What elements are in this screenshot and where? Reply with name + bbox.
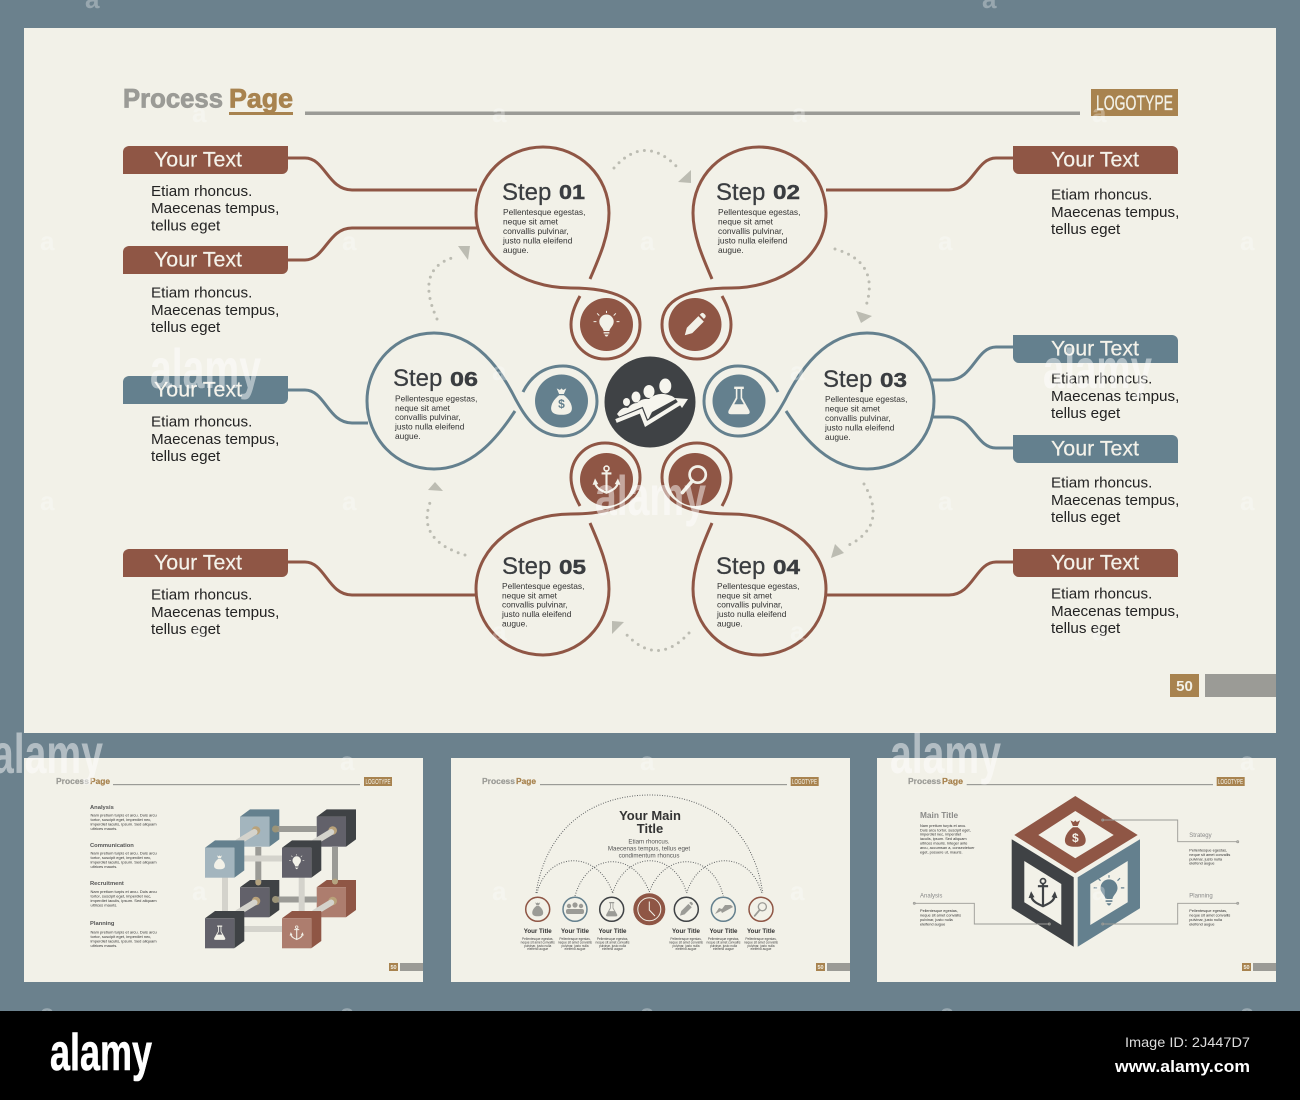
- watermark layer: a: [790, 616, 805, 646]
- text: Strategy: [1189, 833, 1230, 866]
- page number: 50: [1176, 678, 1193, 695]
- step 04 text: augue.: [717, 618, 743, 628]
- node: magnifier: [749, 897, 773, 921]
- text: Main Title: Duis arcu tortor, suscipit eget,: [920, 828, 971, 832]
- watermark layer: a: [192, 876, 207, 906]
- step 04 text: convallis pulvinar,: [717, 600, 783, 610]
- step 04 text: Step: [716, 553, 765, 580]
- callout: left 2: Your Text: [154, 248, 242, 272]
- callout: left 1: Maecenas tempus,: [151, 200, 279, 217]
- step 05 text: [501, 553, 586, 628]
- cube: left face: [1012, 839, 1074, 947]
- labels under nodes: pulvinar, justo nulla: [524, 944, 551, 948]
- title: Process Page: Page: [229, 84, 293, 114]
- watermark layer: alamy: [150, 337, 261, 400]
- callout: right 1: Maecenas tempus,: [1051, 204, 1179, 221]
- step 06 text: [393, 365, 478, 441]
- callout: right 2: Your Text: [1051, 336, 1139, 360]
- step 05 text: neque sit amet: [502, 590, 558, 600]
- watermark layer: a: [192, 98, 207, 128]
- slide header: Page: [516, 777, 537, 786]
- callout: right 1: Your Text: [1051, 148, 1139, 172]
- page number: [1170, 674, 1276, 697]
- step 02 text: convallis pulvinar,: [718, 226, 784, 236]
- main title: Etiam rhoncus.: [628, 838, 670, 846]
- slide header: LOGOTYPE: [366, 779, 391, 786]
- text: Analysis: eleifend augue: [920, 922, 945, 926]
- text: Analysis: ultrices mauris.: [90, 826, 117, 831]
- slide header: [482, 777, 819, 786]
- page number: 50: [817, 965, 824, 971]
- watermark layer: a: [938, 226, 953, 256]
- callout: right 1: tellus eget: [1051, 221, 1121, 238]
- title: Process Page: [123, 84, 293, 115]
- callout: left 4: [123, 549, 288, 638]
- step 03 text: Step: [823, 366, 872, 393]
- icon: money bag: $: [558, 397, 565, 411]
- labels under nodes: eleifend augue: [527, 947, 548, 951]
- text: Communication: [90, 843, 157, 869]
- panel: cube network slide: [24, 758, 423, 982]
- watermark layer: a: [340, 746, 355, 776]
- step 05 text: Step: [502, 553, 551, 580]
- leader lines: [913, 819, 1239, 925]
- text: Analysis: neque sit amet convallis: [920, 914, 961, 918]
- step 05 text: 05: [559, 557, 586, 579]
- watermark layer: a: [1240, 746, 1255, 776]
- step 02 text: Step: [716, 179, 765, 206]
- text: Main Title: [920, 810, 975, 854]
- callout: right 3: Etiam rhoncus.: [1051, 474, 1152, 492]
- title: Process Page: Process: [123, 84, 223, 114]
- callout: left 1: tellus eget: [151, 218, 221, 234]
- front cube: money bag: [205, 840, 244, 878]
- node: money bag: [526, 897, 550, 921]
- step 06 text: neque sit amet: [395, 403, 451, 413]
- step 01 text: convallis pulvinar,: [503, 226, 569, 236]
- step 03 text: justo nulla eleifend: [824, 422, 895, 432]
- node: growth: [711, 897, 735, 921]
- text: Planning: tortor, suscipit eget, imperdiet nec,: [90, 934, 151, 939]
- callout: right 4: Etiam rhoncus.: [1051, 586, 1152, 602]
- slide header: [56, 777, 392, 786]
- watermark layer: alamy: [595, 464, 706, 527]
- text: Main Title: Nam pretium turpis et arcu.: [920, 824, 966, 828]
- labels under nodes: eleifend augue: [676, 947, 697, 951]
- labels under nodes: eleifend augue: [751, 947, 772, 951]
- labels under nodes: Your Title: [599, 928, 627, 935]
- icon: anchor: [580, 453, 633, 506]
- icon: flask: [712, 374, 766, 428]
- page number: 50: [1243, 965, 1250, 971]
- step 06 text: convallis pulvinar,: [395, 412, 461, 422]
- step 03 text: 03: [880, 370, 907, 392]
- page number: [389, 963, 423, 971]
- labels under nodes: Your Title: [672, 928, 701, 935]
- text: Planning: ultrices mauris.: [90, 943, 117, 948]
- panel: main process page: [24, 28, 1276, 733]
- slide header: LOGOTYPE: [792, 779, 817, 786]
- labels under nodes: pulvinar, justo nulla: [747, 944, 775, 948]
- watermark layer: a: [792, 98, 807, 128]
- labels under nodes: Your Title: [710, 928, 738, 935]
- text: Main Title: imperdiet nec, imperdiet: [920, 833, 962, 837]
- text: Strategy: eleifend augue: [1189, 862, 1215, 866]
- step 01 teardrop: [476, 147, 640, 359]
- callout: right 4: Maecenas tempus,: [1051, 603, 1179, 620]
- step 05 text: Pellentesque egestas,: [502, 581, 584, 591]
- step 01 text: Step: [502, 179, 551, 206]
- step 01 text: neque sit amet: [503, 216, 559, 226]
- labels under nodes: neque sit amet convallis: [521, 940, 555, 944]
- text: Communication: tortor, suscipit eget, imperdiet nec,: [90, 855, 151, 860]
- step 03 text: convallis pulvinar,: [825, 413, 891, 423]
- text: Recruitment: ultrices mauris.: [90, 902, 117, 907]
- footer image id: Image ID: 2J447D7: [1125, 1034, 1250, 1050]
- text: Strategy: neque sit amet convallis: [1189, 853, 1230, 857]
- callout: right 4: Your Text: [1051, 550, 1139, 574]
- node: flask: [600, 897, 624, 921]
- slide header: Page: [942, 777, 964, 786]
- callout: right 1: Etiam rhoncus.: [1051, 186, 1152, 204]
- page number: 50: [390, 965, 397, 971]
- step 02 text: justo nulla eleifend: [717, 235, 788, 245]
- watermark layer: a: [492, 356, 507, 386]
- footer bar: [0, 1011, 1300, 1100]
- watermark layer: a: [1092, 616, 1107, 646]
- text: Analysis: [90, 805, 157, 831]
- front cube: lightbulb: [282, 840, 321, 878]
- labels under nodes: pulvinar, justo nulla: [561, 944, 589, 948]
- labels under nodes: neque sit amet convallis: [744, 940, 778, 944]
- main title: Maecenas tempus, tellus eget: [608, 846, 690, 852]
- page number: [1242, 963, 1276, 971]
- panel: dotted arcs slide: [451, 758, 850, 982]
- step 04 teardrop: [662, 443, 826, 655]
- watermark layer: a: [192, 616, 207, 646]
- watermark layer: a: [1240, 998, 1255, 1028]
- step 02 text: 02: [773, 182, 800, 204]
- labels under nodes: pulvinar, justo nulla: [710, 944, 737, 948]
- main title: condimentum rhoncus: [619, 852, 679, 860]
- watermark layer: a: [40, 226, 55, 256]
- labels under nodes: Your Title: [561, 928, 590, 935]
- slide header: Page: [90, 777, 111, 786]
- labels under nodes: pulvinar, justo nulla: [599, 944, 626, 948]
- dotted cycle arrows: [427, 150, 873, 650]
- text: Main Title: arcu, accumsan a, consectetuer: [920, 846, 975, 850]
- watermark layer: a: [342, 226, 357, 256]
- step 06 text: Step: [393, 365, 442, 392]
- callout: right 3: Your Text: [1051, 436, 1139, 460]
- text: Analysis: pulvinar, justo nulla: [920, 918, 954, 922]
- callout: left 2: [123, 246, 288, 336]
- step 02 text: augue.: [718, 245, 744, 255]
- labels under nodes: eleifend augue: [713, 947, 734, 951]
- front cube: flask: [205, 911, 244, 948]
- text: Communication: ultrices mauris.: [90, 864, 117, 869]
- callout: left 4: tellus eget: [151, 621, 221, 638]
- callout: right 2: Maecenas tempus,: [1051, 388, 1179, 405]
- labels under nodes: Pellentesque egestas,: [745, 937, 777, 941]
- watermark layer: a: [40, 998, 55, 1028]
- labels under nodes: Pellentesque egestas,: [597, 937, 628, 941]
- header rule: [305, 112, 1080, 115]
- watermark layer: alamy: [1043, 337, 1152, 400]
- watermark layer: a: [340, 998, 355, 1028]
- labels under nodes: neque sit amet convallis: [595, 940, 630, 944]
- watermark layer: a: [1240, 226, 1255, 256]
- chart: connected cube lattice: [205, 809, 356, 948]
- text: Recruitment: imperdiet iaculis, ipsum. Sed aliquam: [90, 898, 157, 903]
- step 02 text: neque sit amet: [718, 216, 774, 226]
- step 03 text: [823, 366, 907, 442]
- labels under nodes: eleifend augue: [602, 947, 623, 951]
- text: Main Title: iaculis, ipsum. Sed aliquam: [920, 837, 967, 841]
- text: Strategy: pulvinar, justo nulla: [1189, 857, 1223, 861]
- text: Main Title: ultrices mauris. Integer ante: [920, 842, 967, 846]
- callout: left 1: Your Text: [154, 148, 242, 172]
- labels under nodes: eleifend augue: [565, 947, 586, 951]
- callout: left 1: [123, 146, 288, 234]
- step 01 text: [502, 179, 585, 255]
- callout: left 2: Maecenas tempus,: [151, 302, 279, 319]
- callout: left 1: Etiam rhoncus.: [151, 183, 252, 200]
- step 04 text: 04: [773, 557, 801, 579]
- front connecting rods: [225, 855, 302, 932]
- labels under nodes: Your Title: [524, 928, 552, 935]
- watermark layer: a: [940, 998, 955, 1028]
- main title: Your Main: [619, 808, 681, 823]
- labels under nodes: Pellentesque egestas,: [708, 937, 739, 941]
- back cube: bottom left: [240, 880, 279, 917]
- callout: right 1: [1013, 146, 1179, 238]
- text: Main Title: eget, posuere ut, mauris.: [920, 850, 963, 854]
- slide header: LOGOTYPE: [1218, 779, 1243, 786]
- callout: left 4: Etiam rhoncus.: [151, 586, 252, 604]
- step 01 text: Pellentesque egestas,: [503, 207, 585, 217]
- watermark layer: a: [1092, 876, 1107, 906]
- page number: [816, 963, 850, 971]
- text: Strategy: Pellentesque egestas,: [1189, 848, 1227, 852]
- watermark layer: alamy: [890, 722, 1001, 785]
- watermark layer: a: [1240, 486, 1255, 516]
- labels under nodes: Pellentesque egestas,: [522, 937, 553, 941]
- step 06 teardrop: [367, 333, 597, 469]
- back cube: bottom right: [317, 880, 356, 917]
- watermark layer: a: [1092, 98, 1107, 128]
- front cube: anchor: [282, 911, 321, 948]
- back cube: top left: [240, 809, 279, 847]
- step 06 text: justo nulla eleifend: [394, 422, 465, 432]
- callout: right 2: [1013, 335, 1179, 422]
- text: Planning: Pellentesque egestas,: [1189, 909, 1227, 913]
- callout: left 3: tellus eget: [151, 448, 221, 465]
- text: Analysis: imperdiet iaculis, ipsum. Sed aliquam: [90, 821, 157, 826]
- step 03 text: augue.: [825, 432, 851, 442]
- step 03 text: Pellentesque egestas,: [825, 394, 907, 404]
- icon: lightbulb: [580, 298, 633, 351]
- watermark layer: a: [640, 998, 655, 1028]
- node: team: [563, 897, 587, 921]
- callout: left 3: Your Text: [154, 378, 242, 402]
- node: pencil: [674, 897, 698, 921]
- callout: right 3: Maecenas tempus,: [1051, 492, 1179, 509]
- slide header: Process: [908, 777, 942, 786]
- text: Analysis: tortor, suscipit eget, imperdiet nec,: [90, 817, 151, 822]
- labels under nodes: Pellentesque egestas,: [670, 937, 702, 941]
- watermark layer: a: [492, 616, 507, 646]
- step 04 text: [716, 553, 801, 628]
- step 05 teardrop: [476, 443, 640, 655]
- text: Planning: neque sit amet convallis: [1189, 914, 1230, 918]
- watermark layer: a: [40, 486, 55, 516]
- step 05 text: convallis pulvinar,: [502, 600, 568, 610]
- text: Analysis: Analysis: [90, 805, 114, 811]
- step 01 text: justo nulla eleifend: [502, 235, 573, 245]
- step 06 text: Pellentesque egestas,: [395, 394, 477, 404]
- text: Planning: eleifend augue: [1189, 922, 1215, 926]
- text: Analysis: Analysis: [920, 894, 942, 900]
- callout: right 2: tellus eget: [1051, 405, 1121, 422]
- step 01 text: augue.: [503, 245, 529, 255]
- watermark layer: a: [492, 98, 507, 128]
- connector lines: [288, 158, 1013, 595]
- text: Communication: imperdiet iaculis, ipsum. Sed aliquam: [90, 859, 157, 864]
- labels under nodes: Your Title: [747, 928, 776, 935]
- step 04 text: justo nulla eleifend: [716, 609, 787, 619]
- text: Planning: Nam pretium turpis et arcu. Duis arcu: [90, 930, 157, 934]
- step 02 text: Pellentesque egestas,: [718, 207, 800, 217]
- callout: left 2: tellus eget: [151, 319, 221, 336]
- callout: left 3: [123, 376, 288, 465]
- main title: [608, 808, 690, 860]
- icon: money bag: [535, 374, 588, 428]
- step 03 teardrop: [704, 333, 934, 469]
- text: Planning: [1189, 894, 1230, 926]
- text: Planning: pulvinar, justo nulla: [1189, 918, 1223, 922]
- step 05 text: augue.: [502, 618, 528, 628]
- step 04 text: Pellentesque egestas,: [717, 581, 799, 591]
- step 01 text: 01: [559, 182, 585, 204]
- step 05 text: justo nulla eleifend: [501, 609, 572, 619]
- callout: left 4: Maecenas tempus,: [151, 604, 279, 621]
- slide header: Process: [482, 777, 516, 786]
- footer brand: alamy: [50, 1024, 152, 1082]
- icon: pencil: [668, 298, 722, 351]
- callout: left 2: Etiam rhoncus.: [151, 284, 252, 302]
- callout: right 3: [1013, 435, 1179, 526]
- main title: Title: [637, 821, 663, 836]
- labels under nodes: pulvinar, justo nulla: [672, 944, 700, 948]
- labels under nodes: Pellentesque egestas,: [559, 937, 591, 941]
- text: Analysis: [920, 894, 961, 926]
- labels under nodes: neque sit amet convallis: [669, 940, 703, 944]
- slide header: [908, 777, 1245, 786]
- watermark layer: a: [640, 226, 655, 256]
- back cube: top right: [317, 809, 356, 847]
- logotype badge: [1091, 89, 1178, 116]
- text: Planning: Planning: [1189, 894, 1213, 900]
- dotted arcs: [536, 795, 763, 896]
- callout: left 3: Maecenas tempus,: [151, 431, 279, 448]
- logotype badge: LOGOTYPE: [1096, 92, 1173, 115]
- watermark layer: a: [342, 486, 357, 516]
- back connecting rods: [238, 826, 338, 912]
- callout: right 4: [1013, 549, 1179, 637]
- labels under nodes: [521, 928, 778, 951]
- labels under nodes: neque sit amet convallis: [558, 940, 592, 944]
- watermark layer: a: [492, 876, 507, 906]
- step 06 text: augue.: [395, 431, 421, 441]
- text: Analysis: Nam pretium turpis et arcu. Duis arcu: [90, 812, 157, 818]
- step 04 text: neque sit amet: [717, 590, 773, 600]
- labels under nodes: neque sit amet convallis: [706, 940, 741, 944]
- footer url: www.alamy.com: [1114, 1057, 1250, 1076]
- cube: top face: $: [1072, 831, 1079, 845]
- watermark layer: a: [790, 356, 805, 386]
- watermark layer: a: [640, 746, 655, 776]
- slide header: Process: [56, 777, 90, 786]
- text: Planning: imperdiet iaculis, ipsum. Sed aliquam: [90, 938, 157, 943]
- callout: right 2: Etiam rhoncus.: [1051, 370, 1152, 388]
- callout: left 4: Your Text: [154, 550, 242, 574]
- step 02 text: [716, 179, 800, 255]
- icon: magnifier: [668, 453, 722, 506]
- text: Analysis: Pellentesque egestas,: [920, 909, 958, 913]
- cube: top face: [1014, 796, 1138, 873]
- text: Recruitment: [90, 881, 157, 907]
- panel: isometric cube slide: [877, 758, 1276, 982]
- text: Strategy: Strategy: [1189, 833, 1212, 839]
- text: Main Title: Main Title: [920, 810, 958, 820]
- callout: right 3: tellus eget: [1051, 509, 1121, 526]
- text: Planning: [90, 921, 157, 948]
- text: Planning: Planning: [90, 921, 115, 927]
- text: Communication: Nam pretium turpis et arcu. Duis arcu: [90, 850, 157, 856]
- text: Recruitment: tortor, suscipit eget, imperdiet nec,: [90, 894, 151, 898]
- step 02 teardrop: [662, 147, 826, 359]
- text: Recruitment: Nam pretium turpis et arcu. Duis arcu: [90, 889, 157, 894]
- node: clock: [633, 893, 665, 925]
- text: Communication: Communication: [90, 843, 134, 849]
- callout: left 3: Etiam rhoncus.: [151, 414, 252, 430]
- watermark layer: a: [938, 486, 953, 516]
- step 03 text: neque sit amet: [825, 404, 881, 414]
- step 06 text: 06: [450, 369, 478, 391]
- callout: right 4: tellus eget: [1051, 620, 1121, 637]
- icon: central team and growth arrow: [604, 356, 696, 448]
- text: Recruitment: Recruitment: [90, 881, 124, 887]
- cube: right face: [1078, 839, 1140, 947]
- watermark layer: a: [790, 876, 805, 906]
